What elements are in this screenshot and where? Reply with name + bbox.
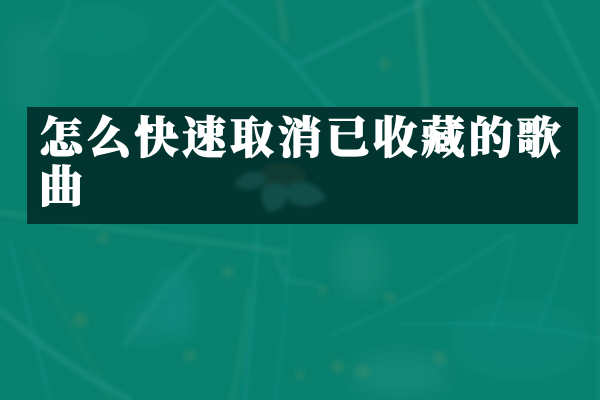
title: 怎么快速取消已收藏的歌曲 xyxy=(39,114,564,212)
panel: dark title band xyxy=(27,107,578,224)
